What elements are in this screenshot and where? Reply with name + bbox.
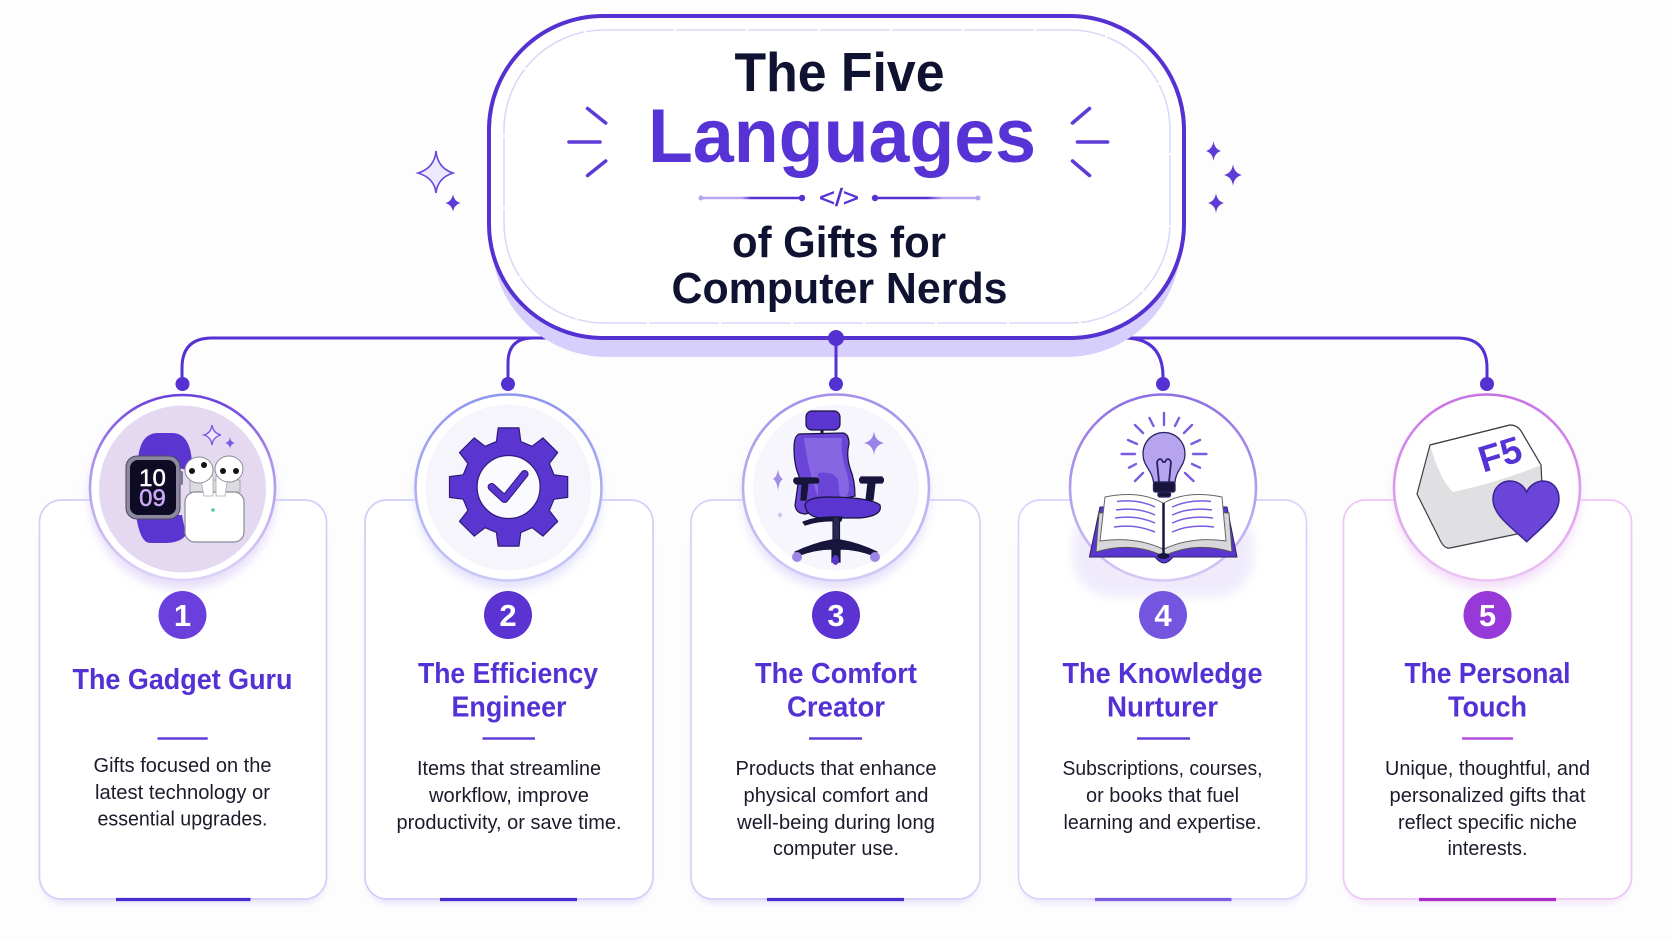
card 3 description: Products that enhance (736, 757, 936, 780)
icon: right sparkles (1206, 141, 1242, 213)
card 3 heading (755, 658, 917, 724)
card 5 description: Unique, thoughtful, and (1385, 757, 1590, 780)
card 4 description: or books that fuel (1086, 784, 1239, 807)
card 2 description: workflow, improve (428, 784, 589, 807)
connectors: branches to the five cards (182, 338, 1487, 384)
icon: right burst rays (1072, 108, 1108, 176)
card 2 number badge (484, 591, 532, 639)
card 3 description (736, 757, 936, 860)
icon: left burst rays (569, 108, 606, 176)
icon: left sparkles (418, 151, 460, 212)
card 3 number badge (812, 591, 860, 639)
card 2 node (501, 377, 515, 391)
card 2 heading: Engineer (452, 692, 566, 724)
card 3 description: well-being during long (736, 811, 935, 834)
icon: open book (1089, 495, 1237, 563)
icon: smartwatch and earbuds: 10 (139, 465, 166, 492)
icon: light bulb rays (1122, 413, 1206, 481)
card 3 description: physical comfort and (744, 784, 928, 807)
card 1 icon circle (90, 395, 275, 580)
card 4 description (1062, 757, 1262, 834)
card 1 description: Gifts focused on the (94, 754, 272, 777)
card 2 description: Items that streamline (417, 757, 601, 780)
card 2 description (396, 757, 622, 834)
card 4 icon circle (1070, 394, 1256, 580)
card 5 number badge: 5 (1479, 598, 1496, 633)
card 1 number badge: 1 (174, 598, 191, 633)
card 4 number badge (1139, 591, 1187, 639)
panel: card 2 (365, 377, 653, 904)
code divider: </> (819, 184, 859, 212)
icon: ergonomic office chair (792, 411, 884, 565)
card 5 description: personalized gifts that (1390, 784, 1586, 807)
card 1 shadow of circle (90, 403, 276, 589)
icon: F5 keycap with heart: F5 (1474, 429, 1527, 480)
title: Computer Nerds: Computer Nerds (672, 264, 1008, 313)
card 3 heading: The Comfort (755, 658, 917, 690)
icon: chair sparkles (773, 431, 884, 519)
panel: card 4 (1018, 377, 1306, 904)
title: Languages: Languages (648, 94, 1036, 179)
card 3 number badge: 3 (827, 598, 845, 633)
card 4 description: Subscriptions, courses, (1062, 757, 1262, 780)
card 1 number badge (158, 591, 206, 639)
card 1 description: latest technology or (95, 781, 270, 804)
card 1 description (94, 754, 272, 830)
card 2 heading (418, 658, 598, 724)
pill bottom line and hub (603, 330, 1070, 384)
panel: card 1 (40, 377, 326, 904)
card 5 description (1385, 757, 1590, 860)
card 2 icon circle (416, 394, 602, 580)
card 5 heading: Touch (1448, 692, 1527, 724)
card 1 heading: The Gadget Guru (72, 664, 292, 696)
panel: card 5 (1344, 377, 1632, 904)
card 3 heading: Creator (787, 692, 885, 724)
card 1 description: essential upgrades. (98, 808, 268, 830)
card 5 heading: The Personal (1404, 658, 1570, 690)
card 5 heading (1404, 658, 1570, 724)
card 3 icon circle (743, 394, 929, 580)
card 4 description: learning and expertise. (1064, 811, 1262, 834)
panel: card 3 (691, 377, 980, 904)
card 5 description: reflect specific niche (1398, 811, 1577, 834)
card 4 heading: The Knowledge (1062, 658, 1262, 690)
icon: F5 keycap with heart (1417, 425, 1559, 548)
card 3 node (829, 377, 843, 391)
icon: smartwatch and earbuds (99, 406, 266, 572)
card 4 heading: Nurturer (1107, 692, 1218, 724)
title: of Gifts for: of Gifts for (732, 218, 946, 267)
card 4 heading (1062, 658, 1262, 724)
icon: light bulb (1143, 432, 1185, 497)
card 5 description: interests. (1448, 837, 1528, 860)
card 1 node (176, 377, 190, 391)
card 4 number badge: 4 (1154, 598, 1172, 633)
icon: smartwatch and earbuds: 09 (139, 485, 166, 512)
card 4 node (1156, 377, 1170, 391)
code divider (698, 184, 980, 212)
title pill (489, 16, 1184, 357)
card 3 description: computer use. (773, 837, 899, 860)
card 2 description: productivity, or save time. (396, 811, 622, 834)
title: The Five: The Five (734, 41, 944, 103)
card 5 number badge (1464, 591, 1512, 639)
card 5 icon circle (1394, 394, 1580, 580)
card 2 heading: The Efficiency (418, 658, 598, 690)
icon: gear with check (450, 428, 568, 546)
card 2 number badge: 2 (499, 598, 517, 633)
card 5 node (1480, 377, 1494, 391)
